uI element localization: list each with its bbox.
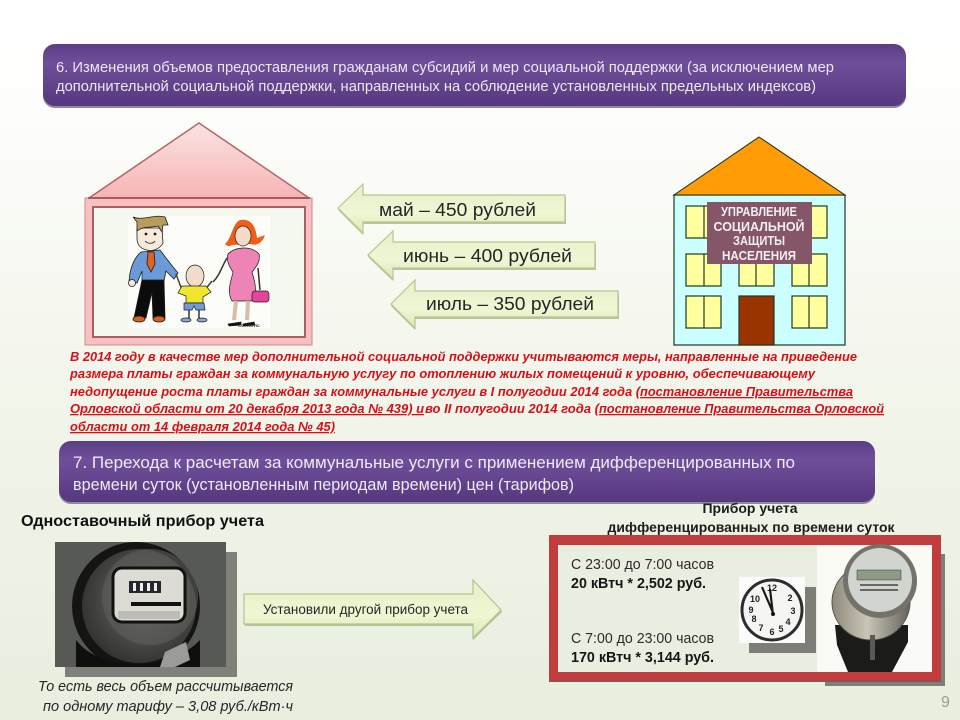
red note text: постановление Правительства <box>640 384 853 399</box>
icon: social protection building <box>674 137 845 345</box>
house frame <box>85 198 312 345</box>
heading banner 6: 6. Изменения объемов предоставления гражданам субсидий и мер социальной поддержки (за исключением мер <box>56 60 834 76</box>
arrow: июнь <box>368 231 596 281</box>
differentiated meter heading <box>608 500 895 535</box>
tariff night <box>571 557 714 592</box>
sign: ЗАЩИТЫ <box>733 233 785 248</box>
arrow: май <box>338 184 566 235</box>
italic tariff caption <box>38 679 293 715</box>
icon: clock: 9 <box>748 605 754 615</box>
red note text: размера платы граждан за коммунальную услугу по отоплению жилых помещений к уровню, обеспечивающему <box>69 366 816 381</box>
icon: clock: 12 <box>767 583 777 593</box>
differentiated meter heading: дифференцированных по времени суток <box>608 519 895 535</box>
tariff day: 170 кВтч * 3,144 руб. <box>571 650 714 666</box>
icon: clock: 8 <box>751 614 757 624</box>
arrow: installed another meter: Установили другой прибор учета <box>263 602 468 617</box>
red note text: недопущение роста платы граждан за коммунальные услуги в I полугодии 2014 года ( <box>70 384 642 399</box>
arrow: июль <box>391 280 619 330</box>
icon: family house <box>85 123 312 345</box>
icon: clock: 7 <box>758 623 764 633</box>
figure: son <box>176 265 212 322</box>
red note text: В 2014 году в качестве мер дополнительной социальной поддержки учитываются меры, направленные на приведение <box>70 349 857 364</box>
door <box>739 296 774 345</box>
tariff night: 20 кВтч * 2,502 руб. <box>571 576 706 592</box>
italic tariff caption: по одному тарифу – 3,08 руб./кВт·ч <box>43 699 293 715</box>
page number: 9 <box>941 694 950 711</box>
icon: clock: 6 <box>769 627 775 637</box>
house roof <box>89 123 309 198</box>
sign: СОЦИАЛЬНОЙ <box>714 219 804 234</box>
figure: mother <box>213 220 269 328</box>
arrow: июль: июль – 350 рублей <box>426 294 594 314</box>
sign <box>707 202 812 264</box>
red note text: во II полугодии 2014 года ( <box>425 401 601 416</box>
icon: clock: 2 <box>787 593 793 603</box>
icon: clock: 10 <box>750 594 760 604</box>
heading banner 7 <box>59 441 875 504</box>
tariff night: С 23:00 до 7:00 часов <box>571 557 714 573</box>
heading banner 7: времени суток (установленным периодам времени) цен (тарифов) <box>73 475 574 494</box>
tariff day: С 7:00 до 23:00 часов <box>571 631 714 647</box>
figure: father <box>128 216 178 322</box>
red note text: Орловской области от 20 декабря 2013 года № 439) и <box>70 401 424 416</box>
sign: УПРАВЛЕНИЕ <box>721 204 797 219</box>
icon: clock: 5 <box>778 624 784 634</box>
figure: mother: CVITKOVIC <box>238 323 260 328</box>
heading banner 6 <box>43 44 906 108</box>
photo: two-rate meter <box>817 544 932 672</box>
italic tariff caption: То есть весь объем рассчитывается <box>38 679 293 695</box>
red note text: постановление Правительства Орловской <box>599 401 884 416</box>
red note text: области от 14 февраля 2014 года № 45) <box>70 419 335 434</box>
arrow: май: май – 450 рублей <box>379 200 536 220</box>
icon: clock: 3 <box>790 606 796 616</box>
tariff day <box>571 631 714 666</box>
sign: НАСЕЛЕНИЯ <box>722 248 796 263</box>
arrow: июнь: июнь – 400 рублей <box>403 246 572 266</box>
arrow: installed another meter <box>244 580 502 640</box>
single-rate meter heading: Одноставочный прибор учета <box>21 513 264 530</box>
differentiated meter heading: Прибор учета <box>702 500 798 516</box>
heading banner 7: 7. Перехода к расчетам за коммунальные услуги с применением дифференцированных по <box>73 453 795 472</box>
panel: two-rate tariffs <box>549 535 945 686</box>
icon: clock: 4 <box>785 617 791 627</box>
heading banner 6: дополнительной социальной поддержки, направленных на соблюдение установленных предельных индексов) <box>56 79 816 95</box>
photo: single-rate meter <box>55 542 237 677</box>
red note text <box>69 349 884 434</box>
icon: clock <box>739 577 816 653</box>
